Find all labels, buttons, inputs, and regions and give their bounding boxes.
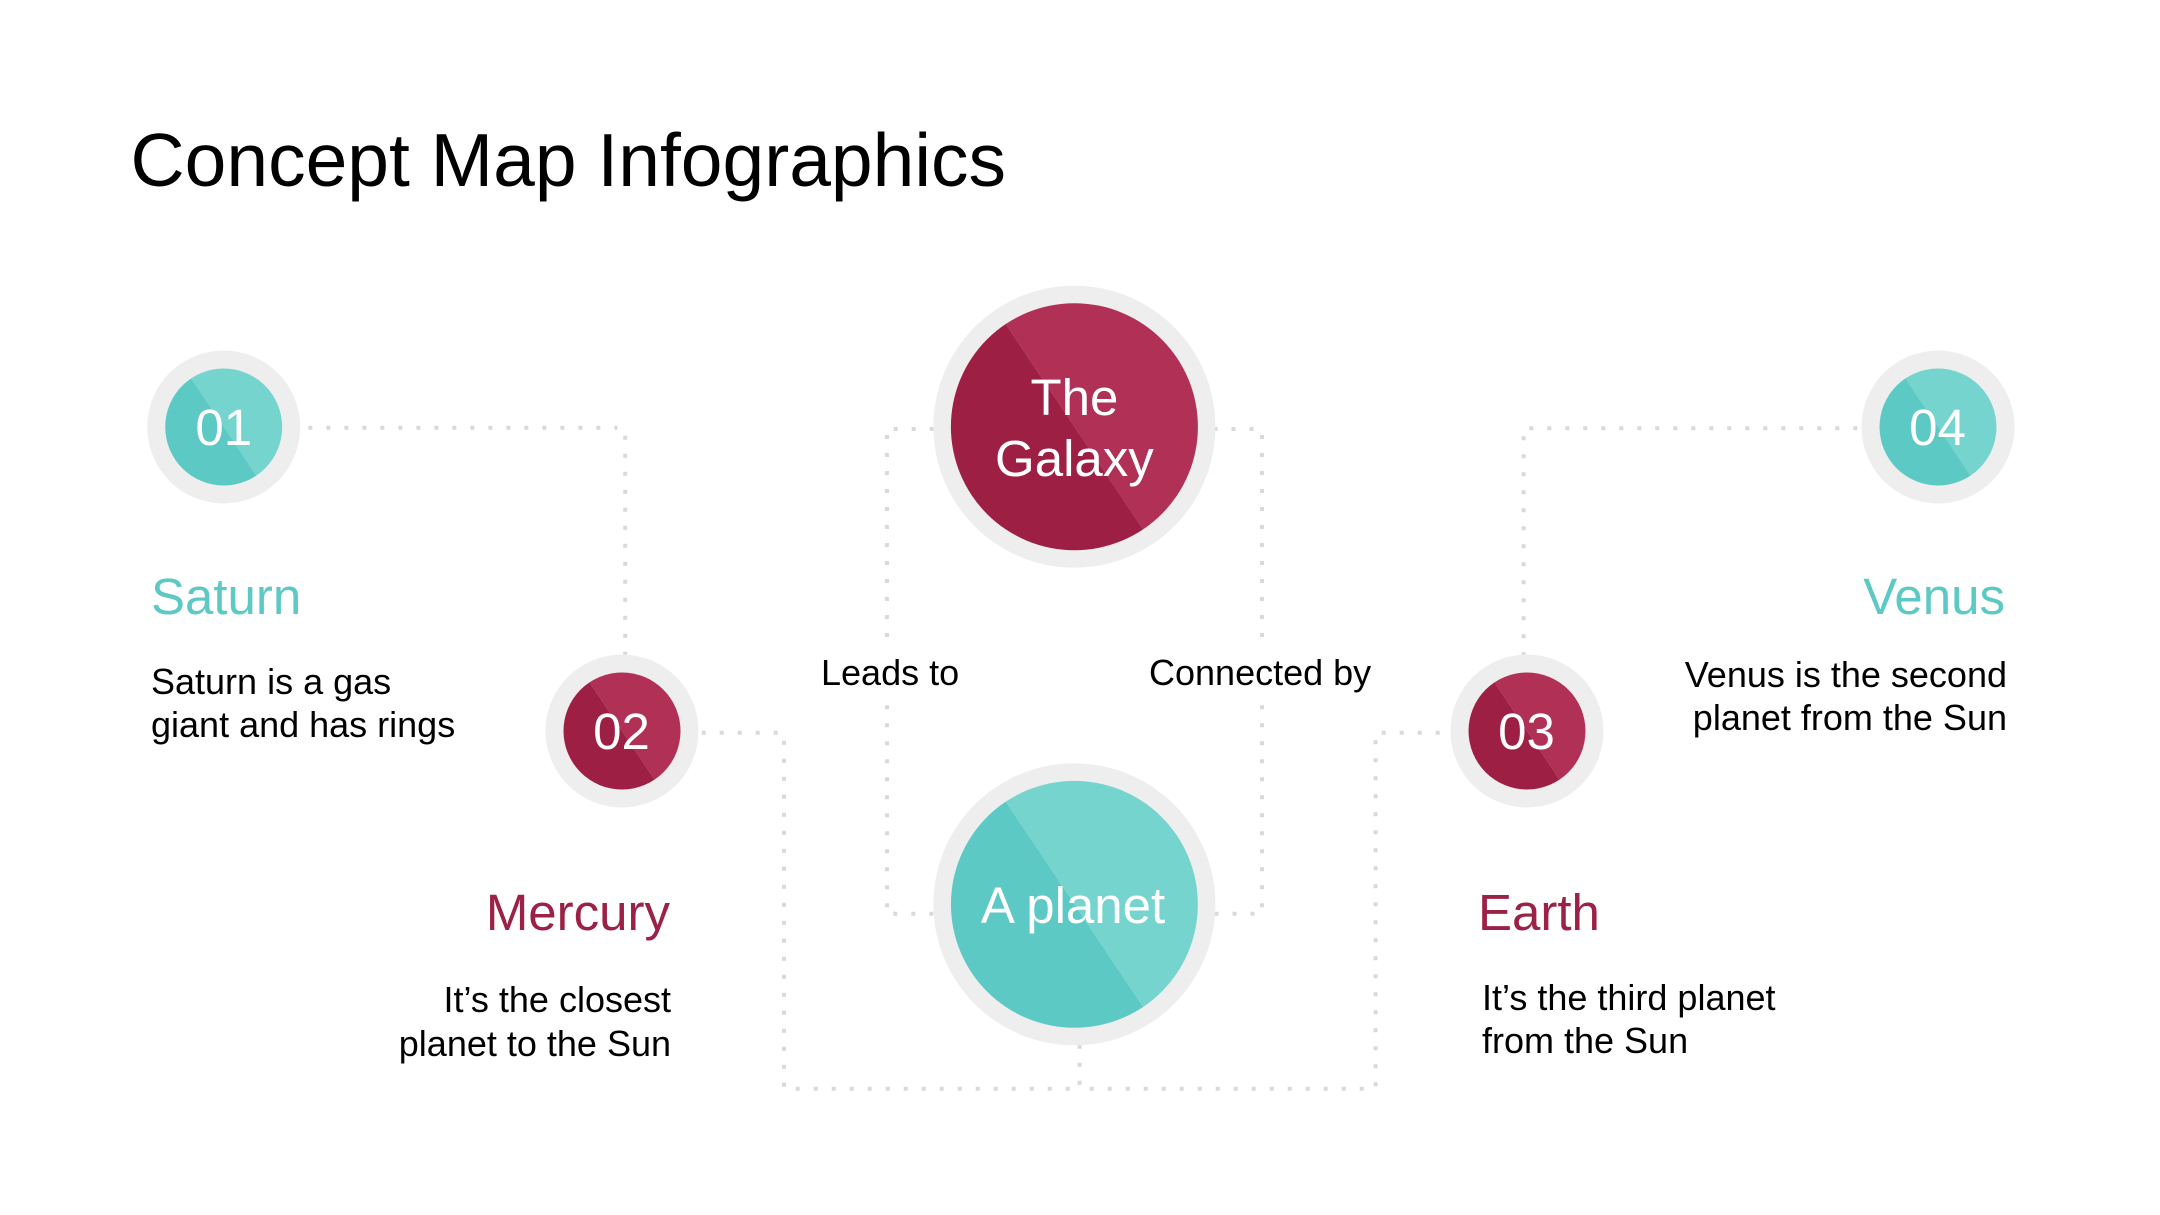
block: Venus: planet from the Sun [1693, 697, 2007, 738]
node: 03: 03 [1498, 703, 1555, 760]
block: Saturn: Saturn [151, 568, 301, 625]
node: 04 [1862, 350, 2014, 504]
node: 04: 04 [1909, 399, 1966, 456]
block: Saturn: Saturn is a gas [151, 661, 391, 702]
block: Saturn [151, 568, 455, 745]
node: 01: 01 [195, 399, 252, 456]
block: Mercury: planet to the Sun [399, 1023, 671, 1064]
node: 03 [1450, 654, 1604, 808]
block: Mercury [399, 884, 671, 1064]
title: Concept Map Infographics [130, 118, 1006, 202]
block: Venus [1685, 568, 2007, 738]
node: A planet [933, 763, 1215, 1045]
node: 02 [546, 654, 698, 808]
node: The Galaxy: The [1030, 369, 1118, 426]
label: Leads to: Leads to [821, 652, 959, 693]
block: Earth: Earth [1478, 884, 1600, 941]
node: A planet: A planet [981, 877, 1165, 934]
block: Mercury: Mercury [486, 884, 670, 941]
block: Earth: It’s the third planet [1482, 977, 1776, 1018]
node: 02: 02 [593, 703, 650, 760]
node: 01 [147, 350, 300, 504]
dotted connectors [308, 428, 1857, 1089]
node: The Galaxy [933, 286, 1215, 568]
block: Earth: from the Sun [1482, 1020, 1688, 1061]
block: Earth [1478, 884, 1776, 1061]
block: Saturn: giant and has rings [151, 704, 455, 745]
node: The Galaxy: Galaxy [995, 430, 1154, 487]
label: Connected by: Connected by [1149, 652, 1371, 693]
block: Venus: Venus is the second [1685, 654, 2007, 695]
block: Venus: Venus [1863, 568, 2005, 625]
block: Mercury: It’s the closest [444, 979, 671, 1020]
